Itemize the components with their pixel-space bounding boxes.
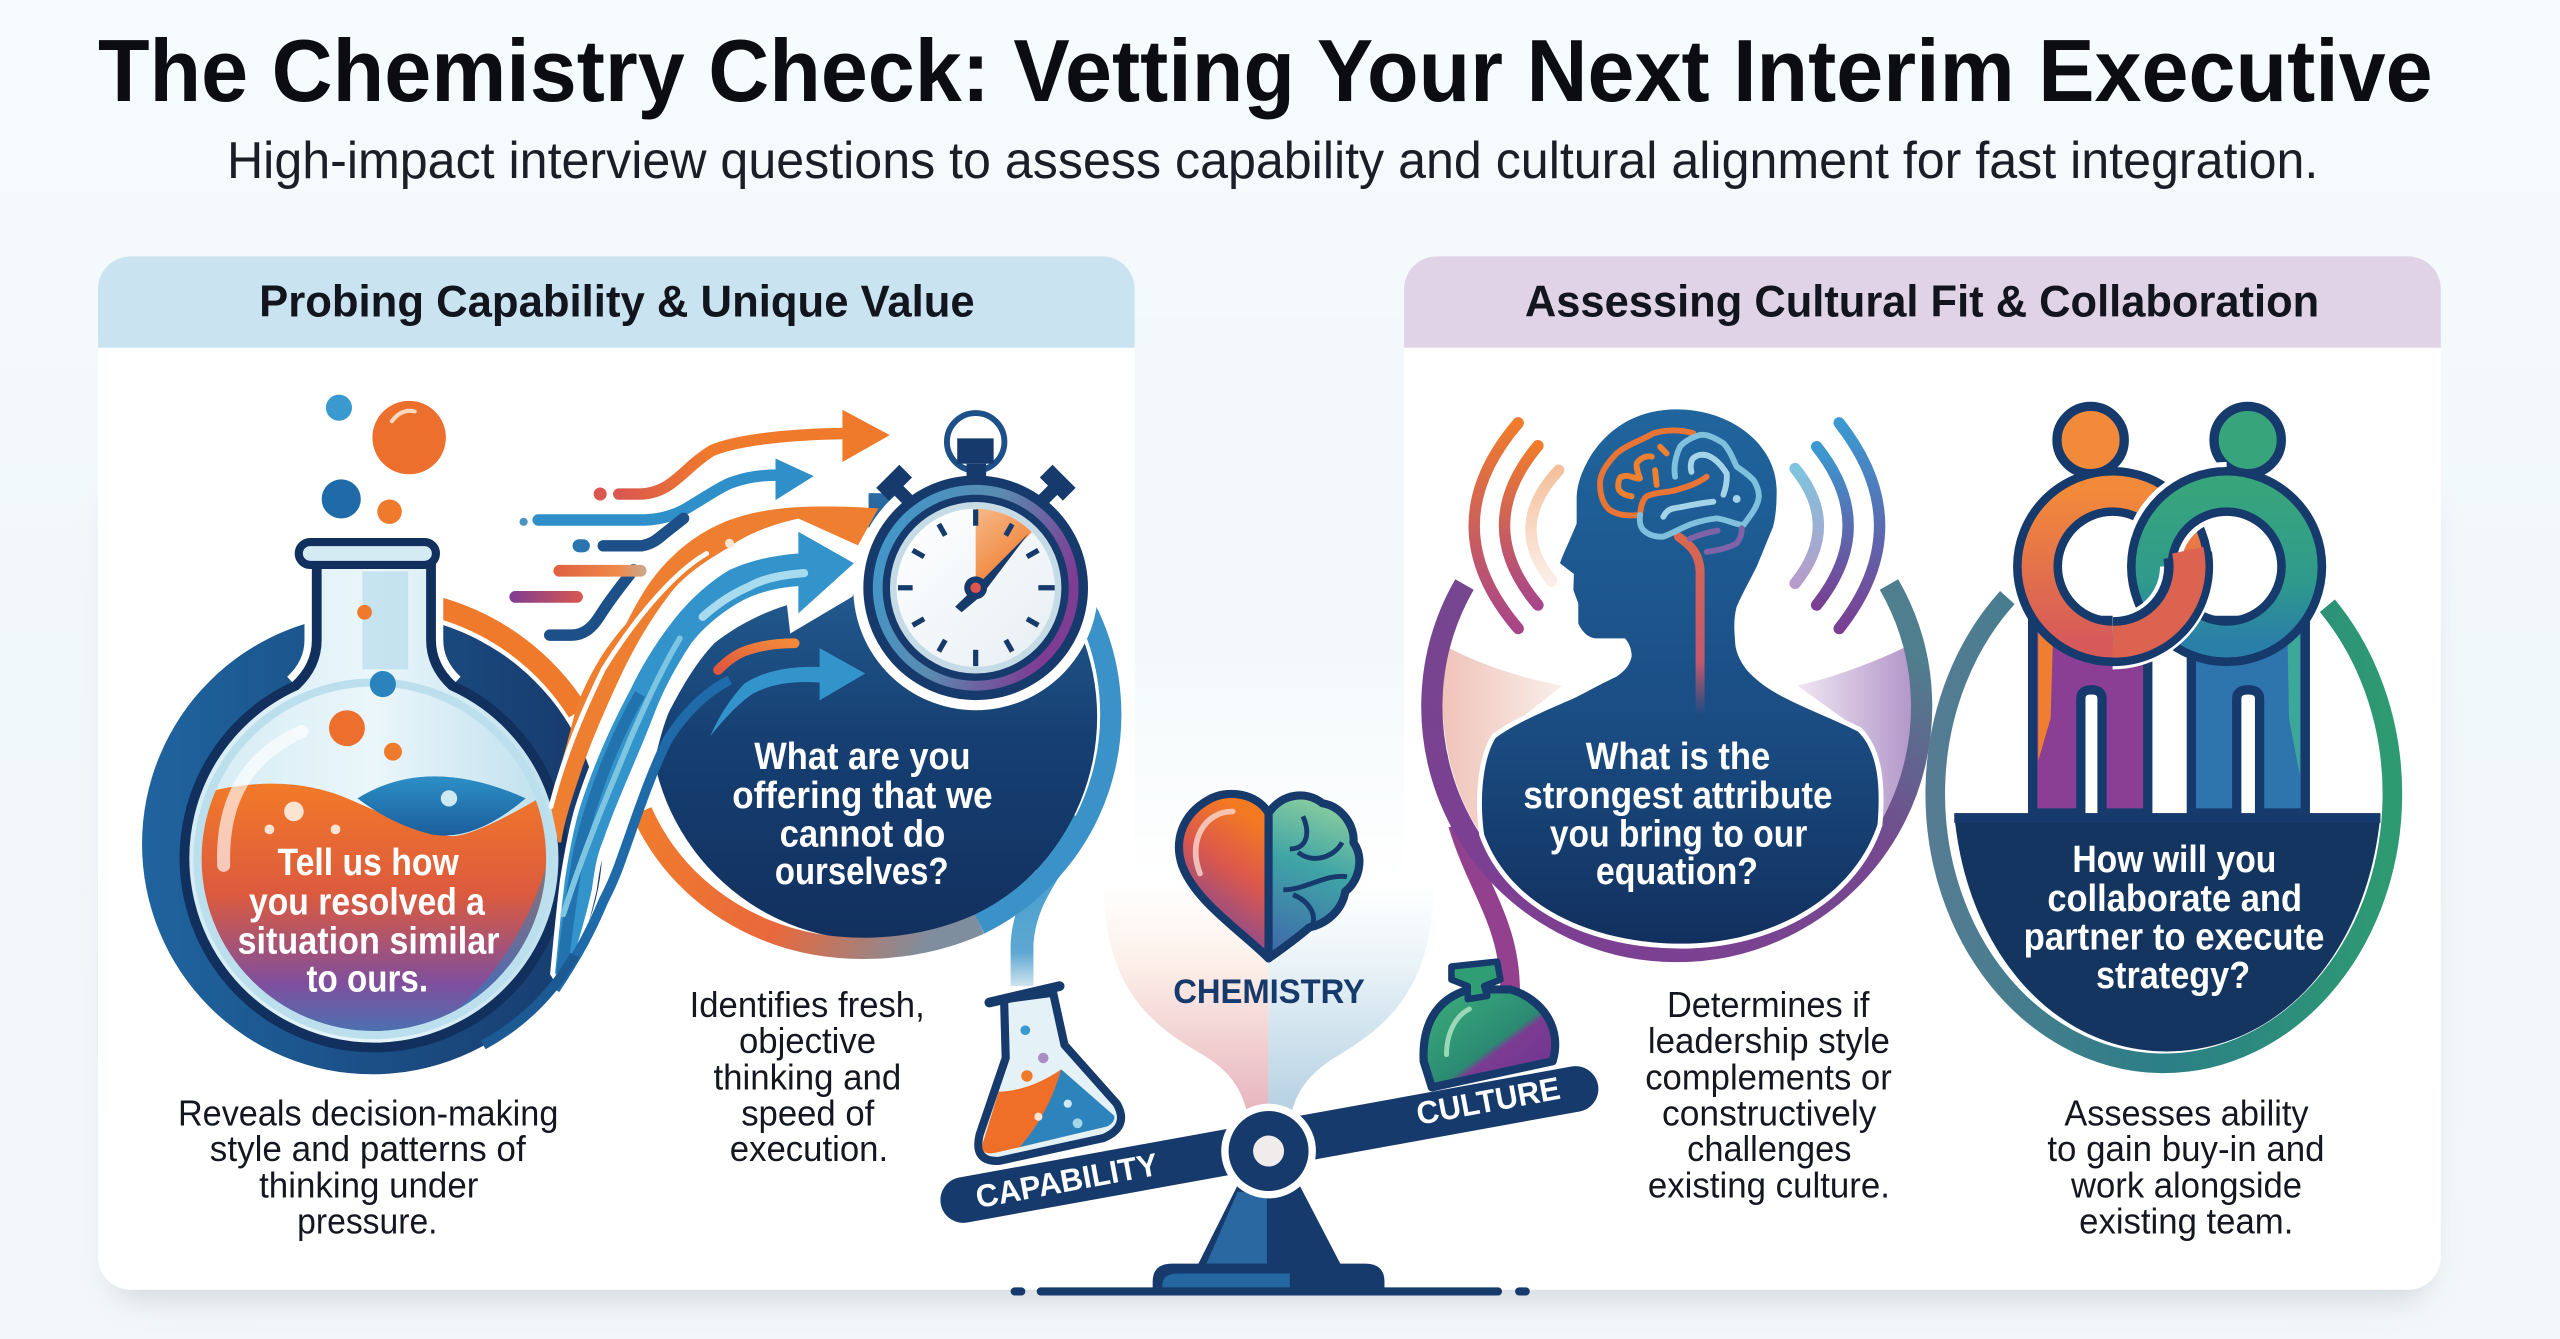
text: attribute description	[1645, 984, 1892, 1206]
text: offering description: Identifies fresh,	[690, 984, 925, 1025]
icon: bubbles above flask	[322, 395, 446, 524]
figure: heads	[2057, 406, 2281, 474]
text: attribute description: challenges	[1687, 1128, 1851, 1169]
text: attribute question: you bring to our	[1550, 812, 1807, 855]
title: The Chemistry Check: Vetting Your Next Interim Executive	[98, 21, 2433, 120]
arrow: thick orange flow	[550, 507, 878, 842]
icon: stopwatch	[853, 413, 1098, 710]
icon: capability flask	[973, 986, 1127, 1162]
text: flask description: Reveals decision-making	[178, 1092, 558, 1133]
figure: left legs	[2033, 620, 2148, 813]
text: offering question: offering that we	[732, 774, 993, 817]
text: flask question: Tell us how	[278, 841, 459, 884]
text: attribute question	[1523, 735, 1832, 893]
text: offering question: ourselves?	[775, 850, 949, 893]
text: flask description: style and patterns of	[210, 1128, 527, 1169]
panel: central card	[98, 318, 2441, 1290]
icon: sound arcs right	[1795, 423, 1880, 629]
heading: culture: Assessing Cultural Fit & Collaboration	[1525, 278, 2319, 327]
icon: two linked figures	[2033, 406, 2305, 813]
text: flask description	[178, 1092, 558, 1242]
text: collaboration description: Assesses ability	[2064, 1092, 2309, 1133]
label: capability: CAPABILITY	[973, 1146, 1161, 1215]
text: collaboration question: collaborate and	[2047, 877, 2302, 920]
icon: culture vessel	[1424, 962, 1555, 1087]
text: offering description: thinking and	[713, 1057, 901, 1098]
scale: stand	[1011, 1185, 1530, 1296]
text: offering question: What are you	[754, 735, 971, 778]
arrow: big blue flow	[555, 532, 854, 986]
panel: capability header	[98, 256, 1135, 348]
text: attribute description: existing culture.	[1648, 1165, 1890, 1206]
scale: beam	[963, 1089, 1576, 1200]
circle: offering question backdrop	[575, 384, 1111, 948]
text: collaboration question: strategy?	[2096, 954, 2250, 997]
text: offering question: cannot do	[780, 812, 945, 855]
arrows: thin speed lines	[538, 433, 846, 635]
text: flask description: thinking under	[259, 1165, 478, 1206]
panel: card shadow	[108, 490, 2433, 1303]
text: collaboration description: work alongside	[2070, 1165, 2302, 1206]
ring: outer purple arc	[1432, 584, 1922, 952]
icon: sound arcs left	[1474, 423, 1559, 629]
circle: flask backdrop	[142, 607, 602, 1074]
text: offering description: objective	[739, 1020, 876, 1061]
text: collaboration description: existing team.	[2079, 1201, 2293, 1242]
arrows: short coloured dashes	[509, 565, 647, 603]
arrow: small blue arrow and orange dash	[710, 643, 865, 736]
arrow: lower blue band	[555, 680, 730, 989]
figure: linked rings	[2038, 491, 2302, 642]
text: flask question: to ours.	[306, 958, 428, 1001]
scale: pivot	[1221, 1104, 1316, 1198]
text: attribute description: Determines if	[1667, 984, 1870, 1025]
figure: right legs	[2191, 620, 2305, 813]
text: attribute question: What is the	[1586, 735, 1770, 778]
circle: collaboration backdrop	[1935, 598, 2392, 1063]
label: culture: CULTURE	[1413, 1070, 1563, 1132]
text: attribute question: strongest attribute	[1523, 774, 1832, 817]
text: offering question	[732, 735, 993, 893]
silhouette: head and shoulders	[1482, 409, 1879, 944]
text: flask question	[238, 841, 500, 1001]
text: attribute description: constructively	[1662, 1092, 1876, 1133]
text: collaboration description	[2047, 1092, 2325, 1242]
tube: blue link to capability flask	[1022, 816, 1078, 986]
text: attribute description: leadership style	[1648, 1020, 1890, 1061]
text: flask question: situation similar	[238, 919, 500, 962]
arrowheads and speed dots	[520, 410, 890, 552]
icon: large round flask	[180, 542, 563, 1061]
text: attribute question: equation?	[1596, 850, 1758, 893]
text: collaboration description: to gain buy-in and	[2047, 1128, 2325, 1169]
text: offering description: execution.	[730, 1128, 888, 1169]
text: collaboration question: How will you	[2072, 838, 2276, 881]
tube: purple link to culture vessel	[1458, 824, 1510, 993]
text: collaboration question: partner to execute	[2024, 916, 2324, 959]
icon: head and brain group	[1432, 409, 1922, 952]
subtitle: High-impact interview questions to assess capability and cultural alignment for fast integration.	[227, 132, 2318, 190]
text: flask description: pressure.	[297, 1201, 438, 1242]
text: offering description	[690, 984, 925, 1169]
icon: heart and brain	[1179, 794, 1359, 958]
text: flask question: you resolved a	[249, 880, 485, 923]
heading: capability: Probing Capability & Unique Value	[259, 278, 975, 327]
text: offering description: speed of	[741, 1092, 875, 1133]
text: attribute description: complements or	[1645, 1057, 1892, 1098]
text: collaboration question	[2024, 838, 2324, 997]
label: chemistry: CHEMISTRY	[1173, 973, 1365, 1011]
arc: flask backdrop lower edge	[483, 955, 575, 1045]
glow: chemistry funnel	[1104, 882, 1433, 1113]
panel: culture header	[1404, 256, 2441, 348]
icon: brain	[1600, 430, 1759, 715]
